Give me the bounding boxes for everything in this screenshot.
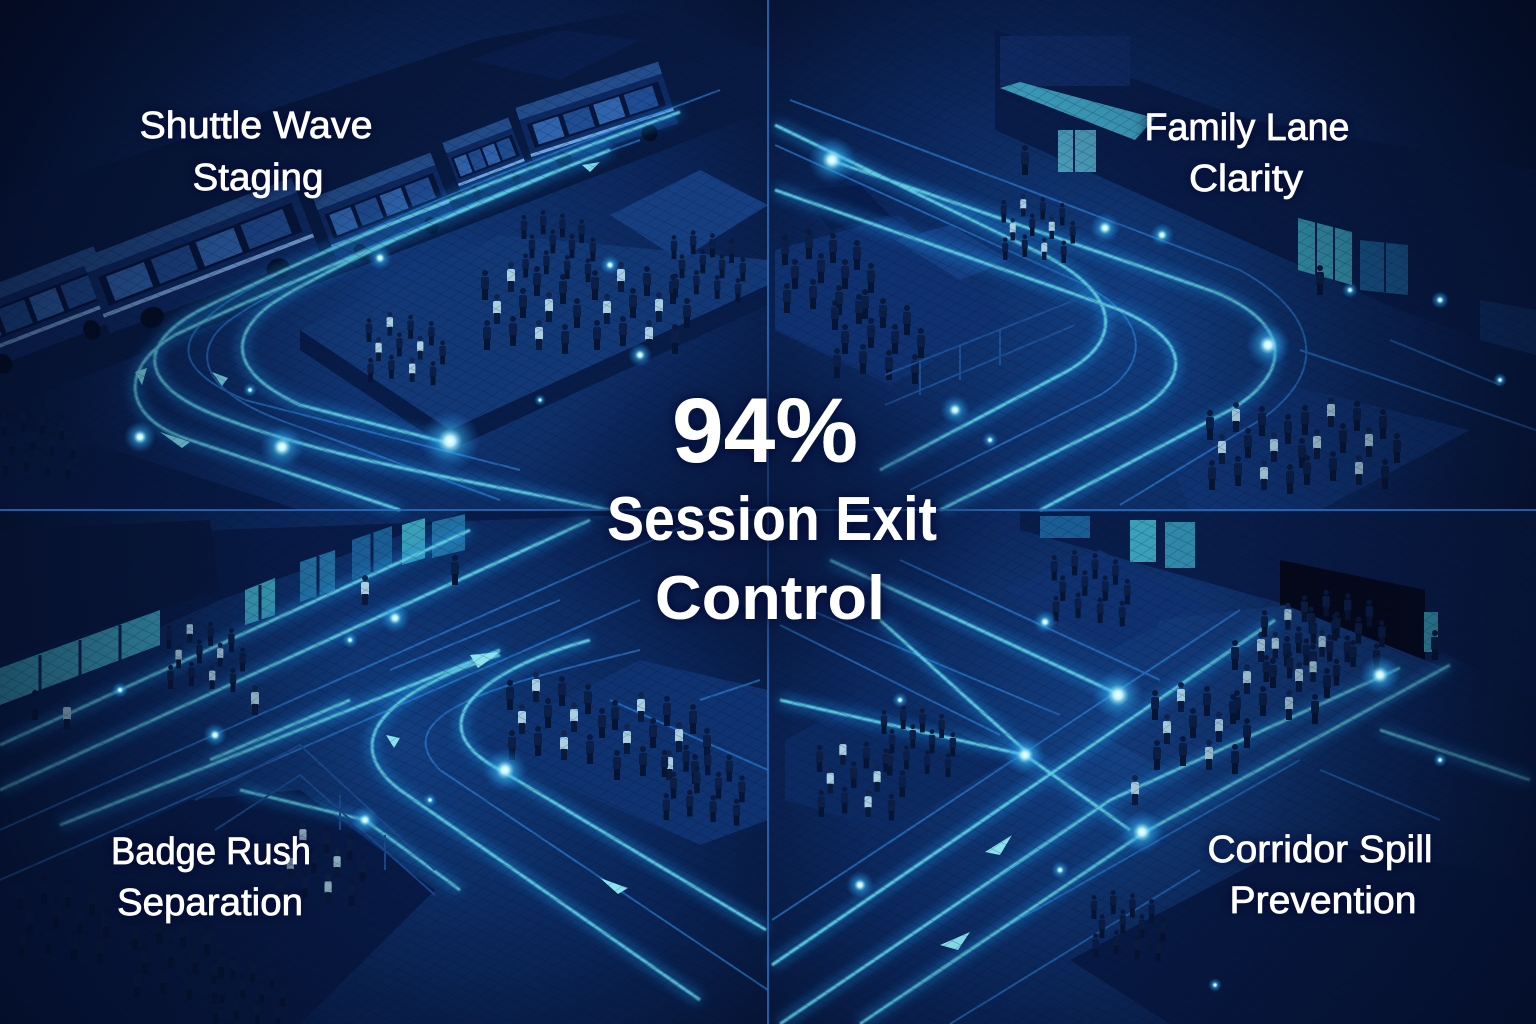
- panel: badge rush separation: [0, 510, 768, 1024]
- glow spots: [112, 136, 1507, 992]
- title line 2: Control: [655, 564, 885, 633]
- panel: corridor spill prevention: [772, 512, 1536, 1024]
- label: family lane clarity: [1144, 107, 1350, 200]
- lane arrows: [386, 652, 628, 894]
- staging pads: [785, 550, 1536, 1024]
- flow lanes: [0, 510, 768, 1000]
- waiting crowd: [1, 210, 746, 479]
- label: corridor spill prevention: [1208, 829, 1432, 922]
- panel: shuttle wave staging: [0, 10, 768, 510]
- label: badge rush separation: Badge Rush: [111, 831, 311, 873]
- terminal building: [995, 30, 1536, 360]
- flow lanes: [135, 90, 720, 510]
- value: 94%: 94%: [672, 380, 858, 482]
- center backdrop: [528, 340, 1008, 680]
- label: corridor spill prevention: Corridor Spill: [1208, 829, 1432, 871]
- crowds: [16, 555, 746, 1024]
- label: badge rush separation: Separation: [117, 882, 303, 924]
- label: shuttle wave staging: [140, 105, 372, 199]
- label: corridor spill prevention: Prevention: [1230, 880, 1416, 922]
- staging plaza: [300, 170, 768, 450]
- flow lanes: [775, 100, 1536, 510]
- crowds: [816, 550, 1439, 962]
- label: shuttle wave staging: Shuttle Wave: [140, 105, 372, 147]
- queue platform: [775, 185, 1470, 510]
- label: shuttle wave staging: Staging: [192, 157, 324, 199]
- shuttle buses: [0, 62, 681, 384]
- title line 1: Session Exit: [607, 485, 937, 554]
- flow lanes: [772, 560, 1530, 1024]
- crowds: [781, 145, 1401, 494]
- crowd platforms: [0, 660, 768, 1024]
- label: family lane clarity: Family Lane: [1144, 107, 1350, 149]
- building and dark exit door: [1020, 512, 1536, 700]
- railing: [195, 745, 435, 895]
- terminal wall and windows: [0, 510, 768, 705]
- label: family lane clarity: Clarity: [1189, 158, 1303, 200]
- lane arrows: [135, 162, 600, 448]
- road and building blocks: [0, 10, 768, 510]
- railing: [885, 300, 1075, 405]
- lane arrows: [940, 835, 1012, 950]
- label: badge rush separation: [111, 831, 311, 924]
- headline stat: [607, 380, 937, 633]
- panel: family lane clarity: [775, 30, 1536, 510]
